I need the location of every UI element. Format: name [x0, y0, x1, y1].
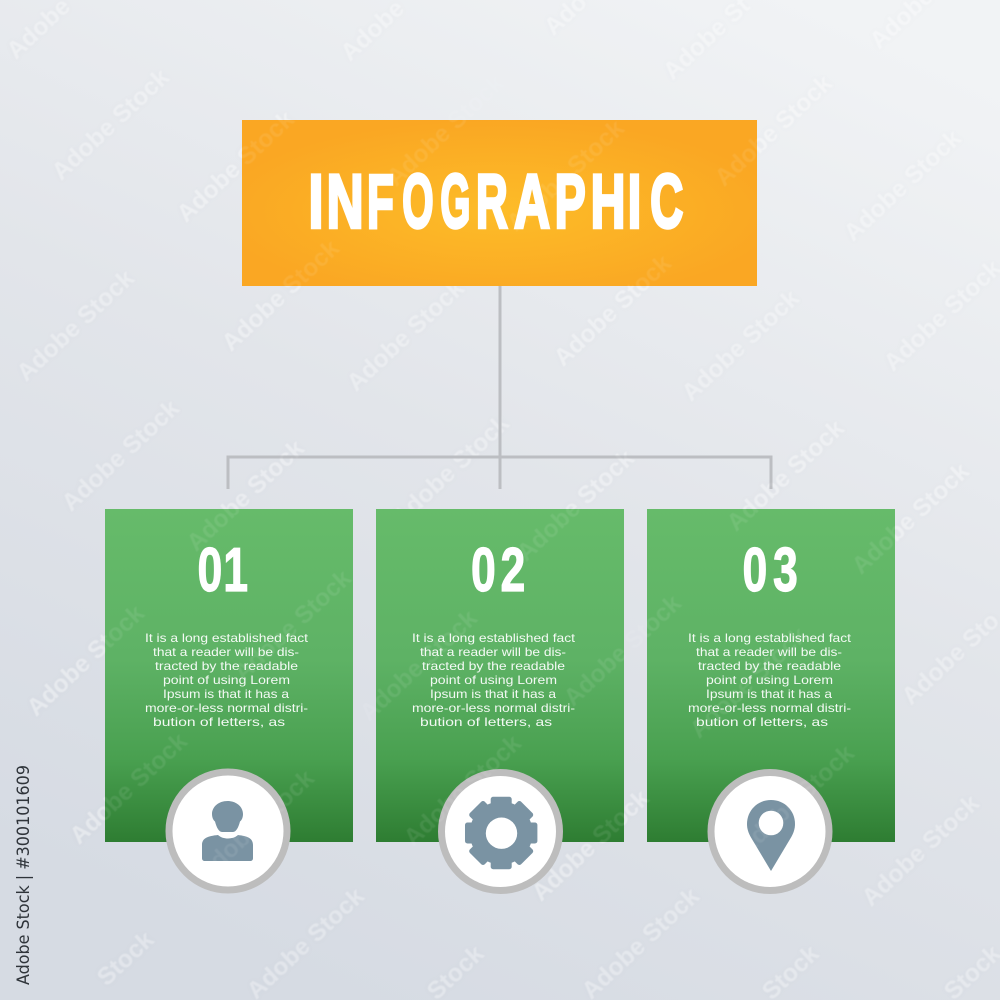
watermarks on background: Adobe Stock	[677, 285, 805, 407]
title box	[242, 120, 757, 286]
title text: O	[402, 160, 434, 245]
icon: person	[169, 772, 287, 890]
title text: I	[308, 160, 324, 245]
watermarks on background: Adobe Stock	[732, 740, 860, 862]
watermarks over panels: Adobe Stock	[192, 765, 320, 887]
panel 2 text: Ipsum is that it has a	[430, 687, 556, 701]
panel 1 text: point of using Lorem	[163, 673, 290, 687]
watermarks over panels: Adobe Stock	[847, 458, 975, 580]
panel 3 text: bution of letters, as	[696, 715, 828, 729]
panel 1 text: more-or-less normal distri-	[145, 701, 308, 715]
panel 1 text: Ipsum is that it has a	[163, 687, 289, 701]
title text: I	[628, 160, 641, 245]
watermarks over panels: Adobe Stock	[512, 445, 640, 567]
panel 3 text	[688, 631, 852, 729]
icon: map pin	[711, 772, 829, 890]
watermarks on background: Adobe Stock	[549, 250, 677, 372]
title text: A	[514, 160, 550, 245]
watermarks over panels: Adobe Stock	[722, 415, 850, 537]
panel 1 text: It is a long established fact	[145, 631, 309, 645]
watermarks over panels: Adobe Stock	[22, 600, 150, 722]
watermarks on background: Adobe Stock	[839, 125, 967, 247]
panel 1 text: bution of letters, as	[153, 715, 285, 729]
panel 3 text: tracted by the readable	[698, 659, 841, 673]
title text: F	[367, 160, 394, 245]
title text: G	[440, 160, 470, 245]
watermarks over panels: Adobe Stock	[65, 728, 193, 850]
watermarks over panels	[22, 70, 975, 907]
watermarks on background: Adobe Stock	[722, 415, 850, 537]
panel 1 background	[105, 509, 353, 842]
title text: N	[327, 160, 364, 245]
watermarks over panels: Adobe Stock	[502, 115, 630, 237]
watermarks on background: Adobe Stock	[217, 235, 345, 357]
watermarks over panels: Adobe Stock	[685, 622, 813, 744]
watermarks over panels: Adobe Stock	[732, 740, 860, 862]
panel 3 text: Ipsum is that it has a	[706, 687, 832, 701]
watermarks over panels: Adobe Stock	[559, 590, 687, 712]
watermarks on background: Adobe Stock	[65, 728, 193, 850]
watermarks on background: Adobe Stock	[57, 395, 185, 517]
watermarks on background: Adobe Stock	[47, 64, 175, 186]
title text: R	[476, 160, 508, 245]
connector lines	[228, 286, 771, 489]
number 02: 02	[471, 536, 525, 605]
panel 1 text	[145, 631, 309, 729]
watermarks on background: Adobe Stock	[527, 785, 655, 907]
panel 3 background	[647, 509, 895, 842]
panel 2 background	[376, 509, 624, 842]
panel 3 text: more-or-less normal distri-	[688, 701, 851, 715]
title background	[242, 120, 757, 286]
watermarks on background: Adobe Stock	[172, 106, 300, 228]
watermarks over panels: Adobe Stock	[382, 70, 510, 192]
watermarks on background: Adobe Stock	[182, 435, 310, 557]
watermarks over panels: Adobe Stock	[549, 250, 677, 372]
watermarks on background: Adobe Stock	[387, 410, 515, 532]
watermarks on background: Adobe Stock	[857, 790, 985, 912]
watermarks on background: Adobe Stock	[847, 458, 975, 580]
number 01: 01	[197, 536, 248, 605]
title text: C	[650, 160, 683, 245]
title text: P	[555, 160, 586, 245]
title text: H	[591, 160, 625, 245]
watermarks on background: Adobe Stock	[22, 600, 150, 722]
panel 1 text: that a reader will be dis-	[153, 645, 299, 659]
watermarks on background: Adobe Stock	[512, 445, 640, 567]
panel 3 text: that a reader will be dis-	[696, 645, 842, 659]
panel 2 text: more-or-less normal distri-	[412, 701, 575, 715]
panel 1	[105, 509, 353, 842]
watermarks over panels: Adobe Stock	[182, 435, 310, 557]
panel 2 text	[412, 631, 576, 729]
panel 2 text: tracted by the readable	[422, 659, 565, 673]
panel 2	[376, 509, 624, 842]
panel 2 text: point of using Lorem	[430, 673, 557, 687]
icon: gear	[442, 772, 560, 890]
stock id text: Adobe Stock | #300101609	[14, 765, 34, 985]
number 03: 03	[743, 536, 798, 605]
panel 2 text: that a reader will be dis-	[420, 645, 566, 659]
panel 3	[647, 509, 895, 842]
watermarks on background: Adobe Stock	[342, 275, 470, 397]
watermarks over panels: Adobe Stock	[710, 70, 838, 192]
watermarks over panels: Adobe Stock	[399, 730, 527, 852]
watermarks over panels: Adobe Stock	[229, 565, 357, 687]
watermarks over panels: Adobe Stock	[527, 785, 655, 907]
panel 3 text: point of using Lorem	[706, 673, 833, 687]
panel 2 text: It is a long established fact	[412, 631, 576, 645]
watermarks on background: Stock	[92, 926, 160, 991]
watermarks on background: Adobe Stock	[12, 265, 140, 387]
watermarks over panels: Adobe Stock	[355, 605, 483, 727]
panel 2 text: bution of letters, as	[420, 715, 552, 729]
panel 3 text: It is a long established fact	[688, 631, 852, 645]
watermarks on background: Adobe Stock	[710, 70, 838, 192]
panel 1 text: tracted by the readable	[155, 659, 298, 673]
watermarks over panels: Adobe Stock	[217, 235, 345, 357]
watermarks over panels: Adobe Stock	[172, 106, 300, 228]
